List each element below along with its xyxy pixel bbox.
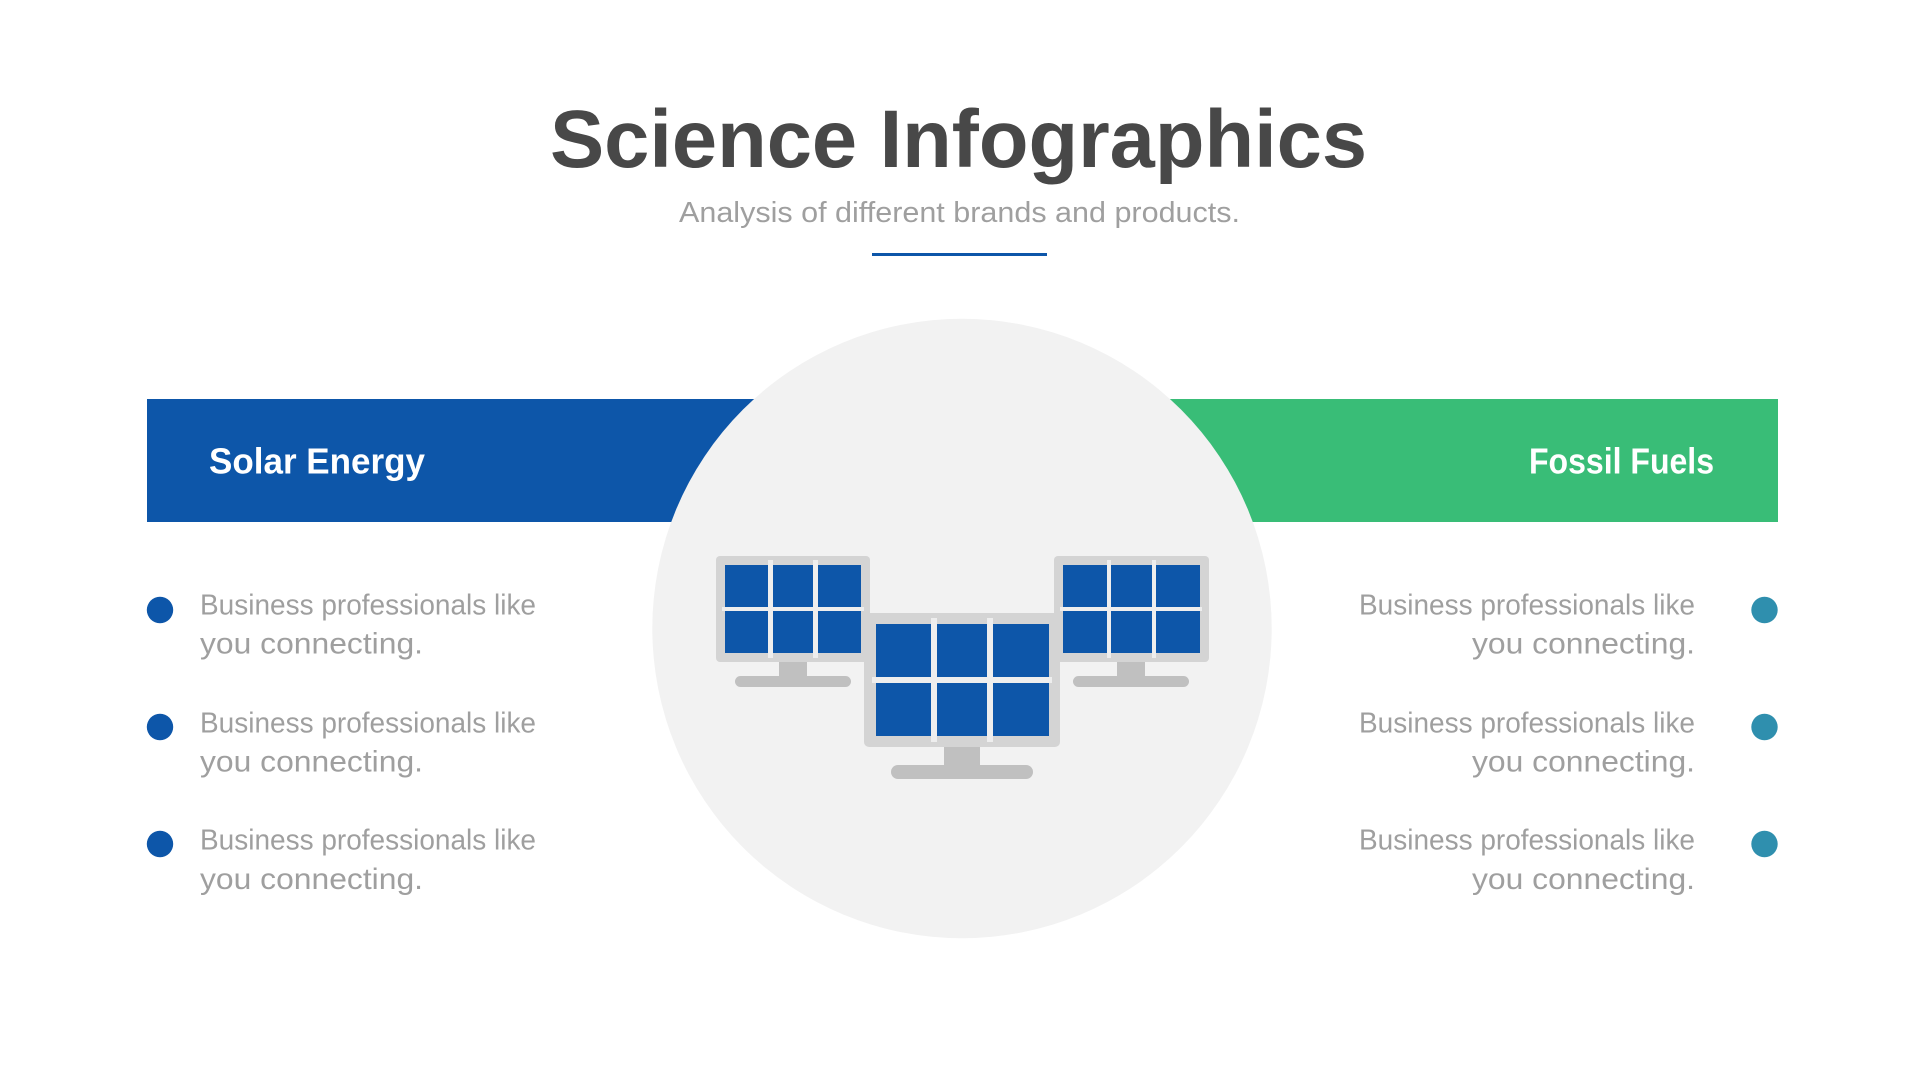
- bullet item 3: Business professionals like: [200, 824, 536, 856]
- bullet item 1: [1359, 590, 1778, 660]
- panel header: Fossil Fuels: Fossil Fuels: [1529, 440, 1714, 482]
- title underline: [872, 253, 1047, 256]
- bullet item 2: you connecting.: [1472, 746, 1695, 778]
- title: Science Infographics: [550, 94, 1367, 185]
- subtitle: Analysis of different brands and products.: [679, 197, 1240, 229]
- bullet item 1: you connecting.: [1472, 628, 1695, 660]
- center circle: [652, 319, 1272, 938]
- bullet item 2: Business professionals like: [1359, 708, 1695, 740]
- bullet item 2: Business professionals like: [200, 708, 536, 740]
- icon: center solar panel: [864, 613, 1060, 779]
- bullet item 3: [1359, 824, 1778, 896]
- bullet item 1: Business professionals like: [200, 590, 536, 622]
- list: Fossil Fuels points: [1359, 590, 1778, 896]
- icon: three solar panels: [716, 556, 1209, 779]
- bullet item 1: [147, 590, 536, 660]
- panel header: Solar Energy: Solar Energy: [209, 440, 425, 482]
- bullet item 3: you connecting.: [200, 863, 423, 896]
- bullet item 2: you connecting.: [200, 746, 423, 778]
- bullet item 2: [147, 708, 536, 778]
- bullet item 1: Business professionals like: [1359, 590, 1695, 622]
- list: Solar Energy points: [147, 590, 536, 896]
- bullet item 3: [147, 824, 536, 896]
- bullet item 3: you connecting.: [1472, 863, 1695, 896]
- bullet item 3: Business professionals like: [1359, 824, 1695, 856]
- panel header: Solar Energy: [147, 399, 847, 522]
- bullet item 1: you connecting.: [200, 628, 423, 660]
- panel header: Fossil Fuels: [1078, 399, 1778, 522]
- icon: left solar panel: [716, 556, 870, 687]
- bullet item 2: [1359, 708, 1778, 778]
- icon: right solar panel: [1054, 556, 1209, 687]
